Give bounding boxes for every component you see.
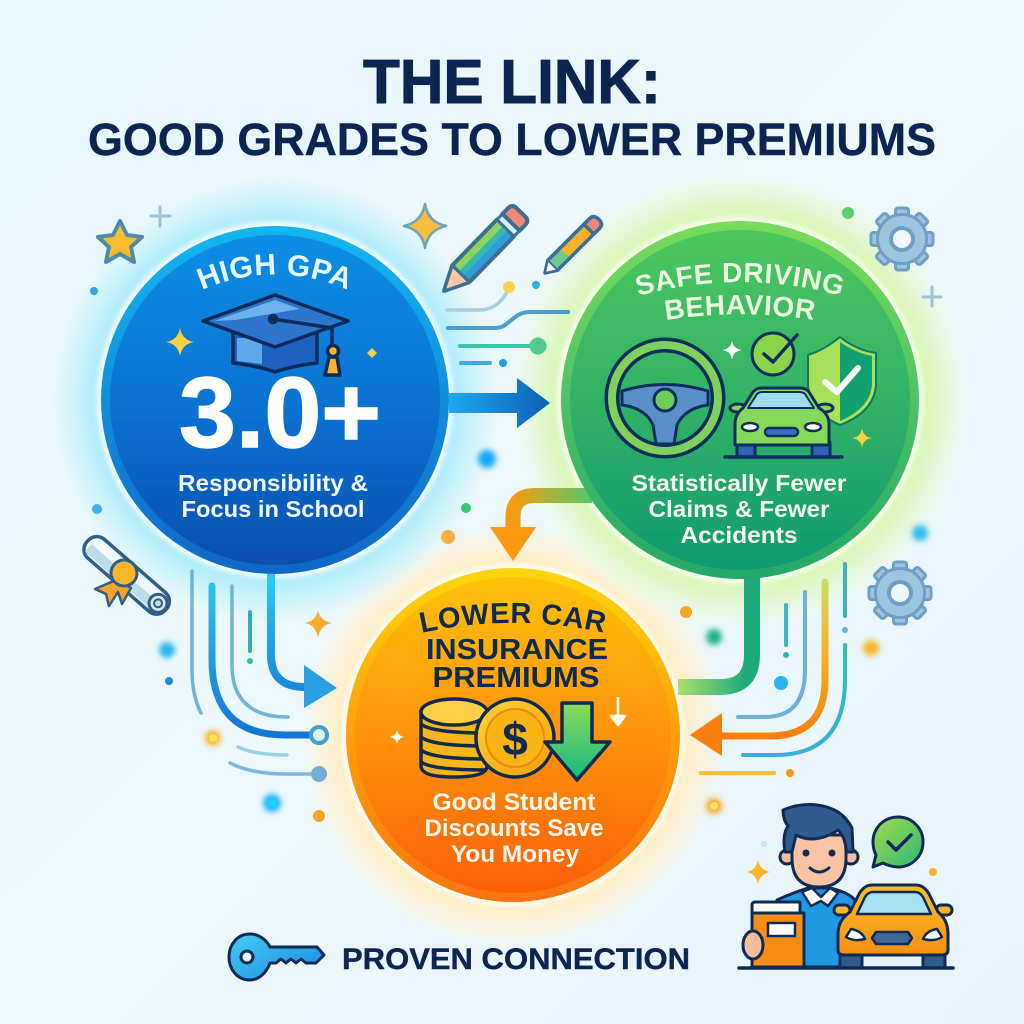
yellow car xyxy=(834,885,952,968)
icon: dollar coin: $ xyxy=(502,713,528,765)
icon: sparkle xyxy=(166,328,194,356)
title: THE LINK: xyxy=(363,48,661,117)
head xyxy=(780,835,858,887)
illustration: student with book and car xyxy=(739,805,953,968)
decorative dots xyxy=(90,207,937,876)
icon: gear lower xyxy=(869,562,931,624)
icon: dollar coin xyxy=(476,699,554,777)
heading: safe driving behavior: BEHAVIOR xyxy=(665,295,814,320)
caption: fewer claims: Accidents xyxy=(680,522,798,548)
shirt xyxy=(777,888,855,967)
icon: green down arrow xyxy=(545,703,610,780)
caption: fewer claims: Statistically Fewer xyxy=(632,470,847,496)
caption: responsibility and focus xyxy=(178,470,368,522)
icon: shield xyxy=(808,337,876,425)
arrow: safe driving to premiums xyxy=(490,496,592,561)
caption: fewer claims xyxy=(632,470,847,548)
arrow: green connector into premiums xyxy=(678,572,752,687)
icon: green car xyxy=(725,388,842,457)
panel: high GPA xyxy=(101,226,449,574)
heading: lower car insurance premiums: PREMIUMS xyxy=(432,662,600,694)
caption: fewer claims: Claims & Fewer xyxy=(648,496,830,522)
caption: responsibility and focus: Focus in School xyxy=(182,496,364,522)
icon: plus left xyxy=(151,207,170,226)
icon: small white down arrow xyxy=(611,697,625,725)
heading: lower car insurance premiums: LOWER CAR xyxy=(420,602,606,632)
heading: safe driving behavior xyxy=(636,262,843,320)
eyes and smile xyxy=(802,850,836,872)
speech bubble check xyxy=(873,817,923,867)
icon: graduation cap xyxy=(203,295,348,375)
caption: good student discounts: Good Student xyxy=(432,789,596,816)
arrow: GPA to safe driving xyxy=(449,378,550,428)
caption: good student discounts: You Money xyxy=(451,841,580,868)
collar xyxy=(802,888,838,906)
caption: good student discounts xyxy=(424,789,604,868)
icon: star xyxy=(98,221,142,262)
icon: coin stack xyxy=(421,699,487,777)
sparkle xyxy=(747,860,770,884)
decorative connector lines between blue and green circles xyxy=(447,281,568,367)
icon: diploma xyxy=(79,532,174,619)
icon: white sparkle xyxy=(390,730,404,744)
heading: lower car insurance premiums xyxy=(420,602,608,694)
icon: small pencil xyxy=(540,214,604,278)
icon: check badge xyxy=(752,333,797,375)
decorative lines lower left xyxy=(192,571,327,782)
heading: lower car insurance premiums: INSURANCE xyxy=(426,634,608,666)
heading: high GPA: HIGH GPA xyxy=(196,254,348,290)
arrow: orange arrow into premiums from right xyxy=(690,582,825,756)
hair xyxy=(783,805,853,852)
icon: white sparkle xyxy=(722,340,742,360)
book xyxy=(743,902,804,967)
heading: safe driving behavior: SAFE DRIVING xyxy=(636,262,843,294)
icon: plus right xyxy=(923,287,941,306)
title xyxy=(88,48,936,165)
panel: safe driving behavior xyxy=(561,221,919,579)
footer: proven connection: PROVEN CONNECTION xyxy=(342,943,690,976)
arrow: GPA down to premiums xyxy=(271,574,337,708)
footer: key icon xyxy=(229,934,324,980)
stat: 3.0+: 3.0+ xyxy=(179,357,381,469)
icon: yellow sparkle xyxy=(852,428,872,448)
panel: lower premiums xyxy=(346,568,680,902)
title: GOOD GRADES TO LOWER PREMIUMS xyxy=(88,114,936,165)
icon: steering wheel xyxy=(612,345,718,451)
icon: large sparkle xyxy=(404,204,446,248)
icon: large pencil xyxy=(435,204,529,299)
ground line xyxy=(739,966,953,970)
icon: orange sparkle xyxy=(305,610,332,638)
caption: good student discounts: Discounts Save xyxy=(424,815,604,842)
decorative lines lower right xyxy=(701,564,848,777)
icon: gear top xyxy=(871,208,933,270)
caption: responsibility and focus: Responsibility & xyxy=(178,470,368,496)
icon: small diamond xyxy=(367,348,377,358)
